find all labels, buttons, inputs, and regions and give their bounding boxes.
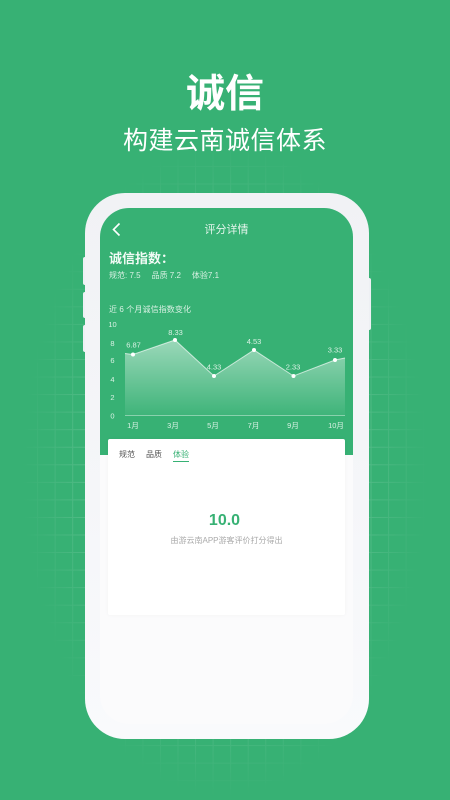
data labels: 2.33 (286, 362, 300, 372)
screen title: 评分详情 (204, 224, 248, 236)
y axis labels: 4 (110, 375, 115, 384)
subtitle: 构建云南诚信体系 (123, 127, 327, 155)
chart line (125, 340, 345, 376)
data labels: 4.53 (247, 337, 261, 346)
tab: quality: 品质 (146, 450, 162, 459)
tab: experience active: 体验 (173, 450, 189, 459)
score card (108, 439, 345, 615)
y axis labels: 6 (110, 356, 115, 365)
data labels: 3.33 (328, 346, 342, 354)
phone body (85, 193, 369, 739)
x axis labels: 10月 (328, 421, 344, 430)
x axis labels: 3月 (167, 421, 179, 430)
phone screen (100, 208, 353, 724)
x axis labels: 9月 (287, 421, 299, 430)
data labels: 6.87 (126, 340, 141, 350)
data labels: 4.33 (207, 362, 221, 372)
index scores: 规范: 7.5 品质 7.2 体验7.1 (109, 271, 219, 280)
data labels (126, 328, 342, 372)
left side button bottom (83, 325, 86, 352)
data labels: 8.33 (168, 328, 183, 337)
index heading: 诚信指数： (109, 251, 174, 266)
y axis labels: 0 (110, 412, 115, 420)
left side button middle (83, 292, 86, 318)
score value: 10.0 (209, 512, 240, 529)
chart heading: 近 6 个月诚信指数变化 (109, 305, 191, 314)
score description: 由游云南APP游客评价打分得出 (170, 536, 282, 545)
tab: standard: 规范 (119, 450, 135, 459)
background grid pattern (41, 174, 409, 766)
green header background (100, 208, 353, 455)
x axis labels: 7月 (248, 421, 259, 430)
right side button (368, 278, 371, 330)
tab: experience active (173, 451, 189, 462)
chart area fill (125, 340, 345, 416)
y axis labels: 8 (110, 339, 115, 348)
line chart (108, 320, 346, 430)
data points (131, 338, 337, 378)
y axis labels: 10 (108, 320, 117, 329)
x axis labels (127, 421, 344, 430)
y axis labels (108, 320, 117, 420)
phone mockup (83, 193, 371, 739)
chart baseline (125, 414, 345, 416)
x axis labels: 5月 (207, 421, 219, 430)
icon: back arrow (112, 222, 120, 236)
title: 诚信 (186, 73, 264, 116)
left side button top (83, 257, 86, 285)
y axis labels: 2 (110, 393, 115, 402)
x axis labels: 1月 (127, 421, 139, 430)
